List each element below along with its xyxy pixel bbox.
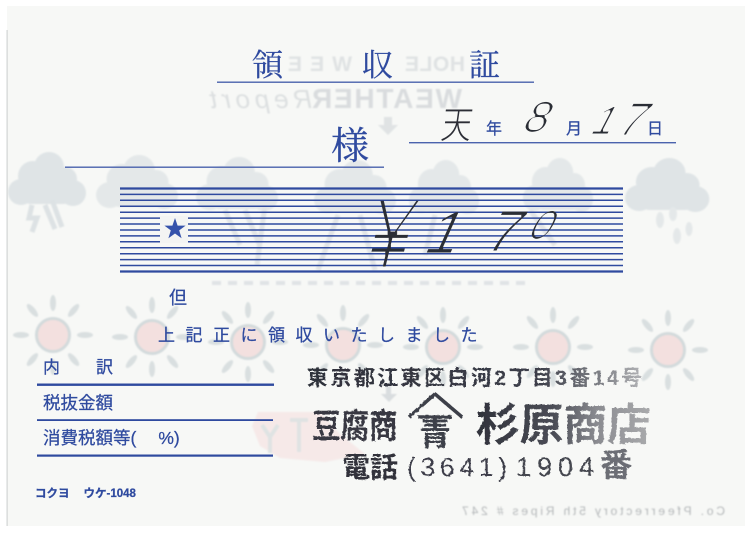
date: 年 (486, 120, 502, 138)
handwritten month and day (519, 92, 658, 146)
stamp: ban: 番 (600, 447, 632, 483)
ghost: storm clouds row (8, 152, 709, 244)
ghost: mirrored report: Report (208, 84, 312, 114)
ghost: arrow under sun (381, 386, 397, 402)
handwritten amount digits: 7 (482, 200, 532, 264)
label: 消費税額等: 消費税額等( %) (43, 428, 180, 448)
stamp: area code: (3641) (407, 452, 507, 482)
title: 領収証: 領 (252, 48, 284, 83)
handwritten amount digits: 0 (524, 202, 564, 248)
ghost: down arrow (378, 117, 398, 135)
handwritten year: 天 (438, 94, 477, 149)
ghost: suns row (13, 295, 708, 390)
breakdown table (37, 358, 274, 457)
stamp: logo mark (409, 394, 462, 452)
recipient: 様: 様 (331, 126, 369, 168)
star mark (160, 216, 188, 243)
title: 領収証: 収 (362, 48, 393, 83)
stamp: number: 1904 (516, 452, 594, 482)
handwritten amount digits: 1 (421, 199, 471, 266)
ghost: mirrored footer: Co. Pfeerrectory 5th Ripes # 247 (462, 504, 725, 518)
stamp: logo mark: 青 (419, 416, 451, 452)
stamp: address: 東京都江東区白河2丁目3番14号 (307, 367, 642, 390)
stamp: shop name: 杉原商店 (476, 401, 651, 450)
date: 日 (647, 121, 663, 138)
label: 内訳: 内 訳 (43, 358, 113, 377)
ghost: pink lower text (252, 412, 365, 462)
label: 税抜金額: 税抜金額 (43, 393, 113, 413)
handwritten yen mark: ¥ (364, 179, 425, 290)
ghost: centre rain shapes (225, 205, 555, 270)
ghost: dashed row (212, 281, 530, 285)
statement line: 上記正に領収いたしました (158, 326, 488, 345)
stamp: trade: 豆腐商 (312, 408, 397, 446)
date (409, 92, 676, 149)
title: 領収証: 証 (469, 48, 500, 83)
amount box: striped field (120, 179, 623, 290)
title: 領収証 (217, 48, 534, 83)
ghost: mirrored heading HOLE: HOLE (405, 53, 465, 76)
handwritten amount digits (421, 199, 564, 266)
ghost: mirrored weather: WEATHER (312, 83, 462, 114)
stamp: telephone label: 電話 (342, 452, 398, 483)
handwritten month and day: 8 (519, 92, 558, 142)
proviso: 但: 但 (169, 288, 187, 308)
handwritten month and day: 1 (587, 98, 624, 143)
shop stamp (307, 367, 651, 483)
date: 月 (566, 121, 582, 138)
ghost: mirrored heading WEE: WEE (288, 53, 352, 76)
handwritten month and day: 7 (614, 94, 658, 146)
form number: コクヨ ウケ-1048 (35, 487, 137, 500)
